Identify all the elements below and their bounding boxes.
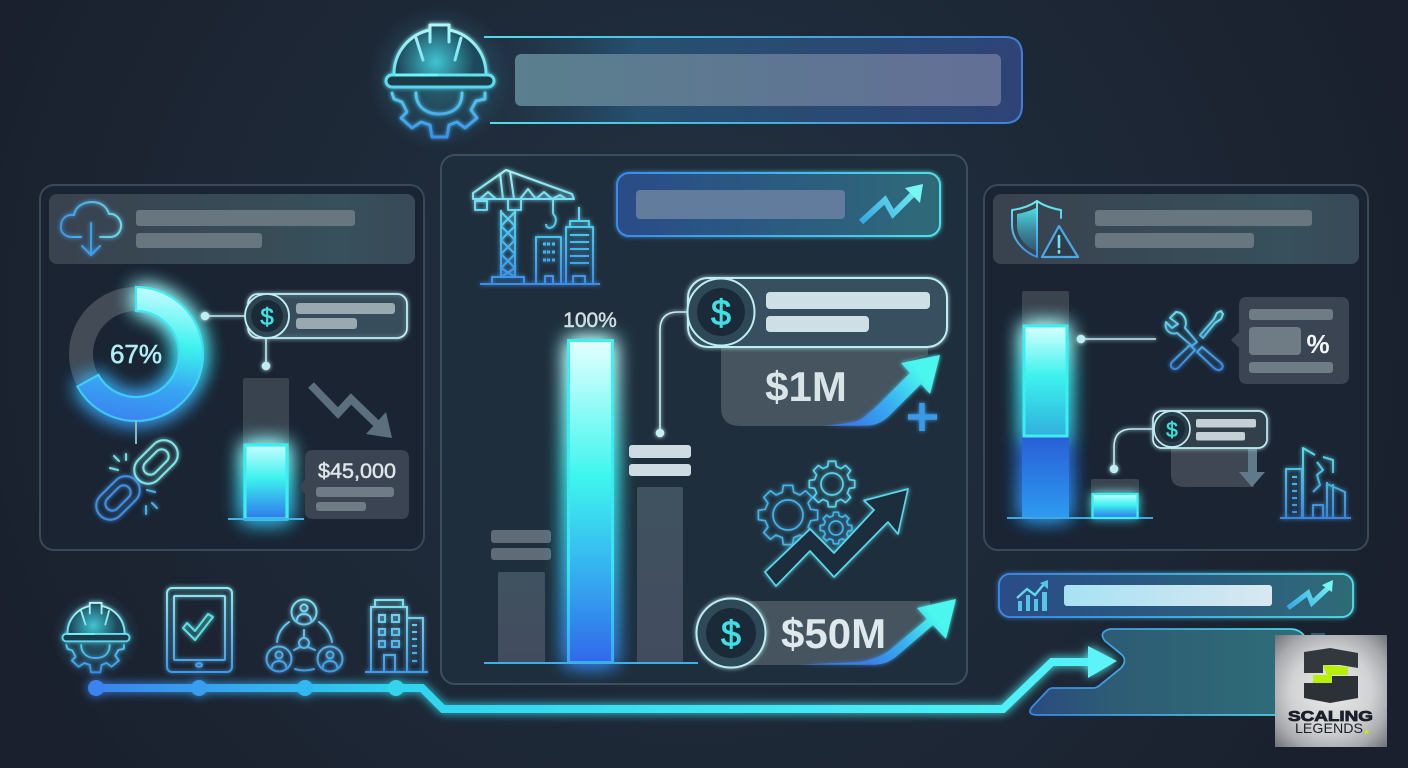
icon: damaged buildings xyxy=(1280,448,1351,518)
connector: donut to chain xyxy=(135,421,137,444)
logo: Scaling Legends: LEGENDS xyxy=(1295,720,1363,736)
tooltip: $45,000: $45,000 xyxy=(318,460,396,483)
panel: right risk panel xyxy=(984,185,1368,550)
timeline path and arrow xyxy=(88,646,1117,709)
bar chart: tall bar xyxy=(1007,291,1153,518)
title placeholder bar xyxy=(515,54,1001,106)
callout: dollar small xyxy=(1153,411,1267,448)
$1M tile with arrow: $1M xyxy=(765,363,847,410)
callout: dollar large xyxy=(688,278,947,347)
bottom-right summary pill xyxy=(999,574,1353,617)
left panel header xyxy=(49,194,415,264)
small bar with fill xyxy=(1091,479,1139,518)
icon: office building xyxy=(365,600,428,672)
timeline icons xyxy=(52,588,428,680)
callout: dollar xyxy=(245,294,407,338)
down tile with arrow xyxy=(1171,448,1265,487)
icon: small hard hat xyxy=(52,592,140,680)
icon: cloud download xyxy=(61,202,121,255)
bar: left grey with labels xyxy=(491,530,551,663)
bar: right grey with labels xyxy=(629,445,691,663)
icon: tablet check xyxy=(167,588,232,672)
icon: crossed tools xyxy=(1166,311,1223,370)
right panel header xyxy=(993,194,1359,264)
top highlight pill xyxy=(617,173,940,236)
header banner xyxy=(470,37,1023,123)
$50M tile with arrow: $ xyxy=(721,613,741,654)
connector: bar to tools xyxy=(1078,336,1156,342)
bar chart: three bars xyxy=(484,340,698,663)
arrow: downward trend xyxy=(311,385,392,438)
callout: dollar small: $ xyxy=(1166,419,1178,442)
tooltip: percent xyxy=(1231,297,1349,384)
icon: trend arrow xyxy=(1288,580,1333,608)
icon: team network xyxy=(266,600,342,672)
$50M tile with arrow: $50M xyxy=(781,610,886,657)
connector: donut to callout xyxy=(202,312,245,320)
callout: dollar: $ xyxy=(260,304,274,331)
icon: hard hat with gear xyxy=(368,6,512,150)
destination arrow shape xyxy=(1030,629,1325,715)
timeline nodes xyxy=(88,680,404,696)
icon: trend arrow xyxy=(861,184,923,222)
tooltip: percent: % xyxy=(1306,329,1330,359)
callout: dollar large: $ xyxy=(711,292,731,333)
icon: shield with warning xyxy=(1012,201,1078,257)
$50M tile with arrow xyxy=(696,598,956,668)
icon: broken chain xyxy=(90,434,184,526)
connector: small bar to callout xyxy=(1110,429,1155,472)
bar: centre highlighted 100% xyxy=(568,340,612,662)
bar label 100%: 100% xyxy=(563,309,617,332)
connector: bar to $1M callout xyxy=(656,312,690,436)
panel: left cost panel xyxy=(40,185,424,550)
$1M tile with arrow xyxy=(721,347,940,431)
icon: tower crane and buildings xyxy=(473,170,600,284)
icon: bar chart with arrow xyxy=(1017,580,1048,611)
connector: callout to bar xyxy=(262,338,270,370)
tooltip: $45,000 xyxy=(298,450,409,519)
donut chart 67%: 67% xyxy=(110,339,162,369)
icon: plus xyxy=(908,403,937,431)
bar chart: reduced bar xyxy=(228,378,304,519)
donut chart 67% xyxy=(77,287,203,421)
icon: gears and rising arrow xyxy=(758,461,908,586)
logo: Scaling Legends xyxy=(1275,635,1387,747)
panel: centre growth panel xyxy=(441,155,967,684)
logo: Scaling Legends: SCALING xyxy=(1288,708,1373,725)
